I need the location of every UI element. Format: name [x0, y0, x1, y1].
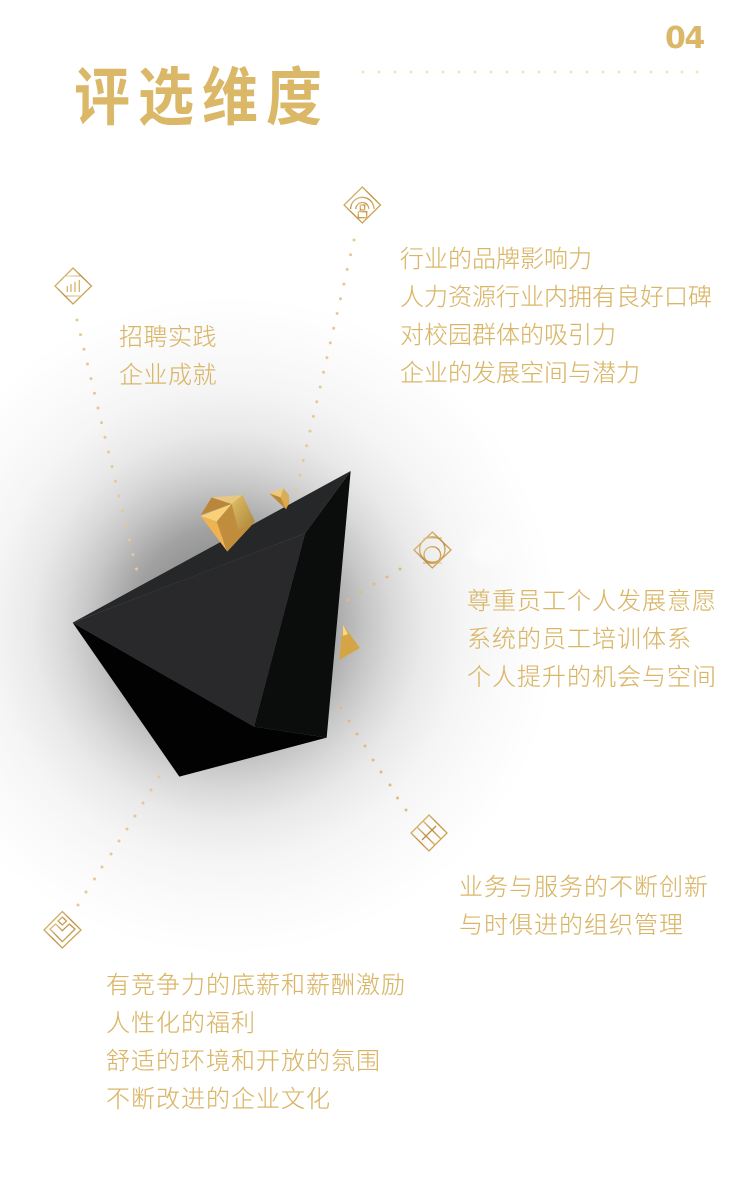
text block: lower left — [106, 972, 406, 1113]
text block: top — [400, 246, 712, 387]
text block: lower left: 有竞争力的底薪和薪酬激励 — [106, 972, 406, 999]
gem: hidden behind polyhedron on right — [339, 625, 360, 660]
text block: lower left: 舒适的环境和开放的氛围 — [106, 1048, 381, 1075]
dotted line: to lower right icon — [339, 706, 408, 812]
text block: lower right: 业务与服务的不断创新 — [459, 874, 709, 901]
title: 评选维度 — [74, 62, 330, 133]
dotted line: to right icon — [346, 568, 402, 602]
gem: large gold — [201, 495, 255, 552]
text block: top: 对校园群体的吸引力 — [400, 322, 616, 349]
dotted line: to lower left icon — [76, 776, 160, 906]
text block: top: 人力资源行业内拥有良好口碑 — [400, 284, 712, 311]
icon: diamond with circles (right) — [414, 532, 451, 568]
icon: diamond with bars (left) — [55, 268, 92, 304]
text block: left: 企业成就 — [119, 362, 217, 389]
text block: right: 系统的员工培训体系 — [467, 626, 692, 653]
gem: small gold — [269, 488, 289, 509]
text block: right: 尊重员工个人发展意愿 — [467, 588, 717, 615]
text block: top: 行业的品牌影响力 — [400, 246, 592, 273]
text block: lower right: 与时俱进的组织管理 — [459, 912, 684, 939]
page number: 04 — [665, 21, 704, 56]
text block: right: 个人提升的机会与空间 — [467, 664, 717, 691]
text block: left — [119, 324, 217, 389]
text block: lower left: 人性化的福利 — [106, 1010, 256, 1037]
dotted line: top dots — [362, 70, 698, 74]
text block: lower right — [459, 874, 709, 939]
dotted line: to top icon — [295, 238, 356, 492]
black polyhedron — [73, 471, 351, 777]
icon: diamond with nested squares (lower right) — [411, 815, 447, 851]
text block: lower left: 不断改进的企业文化 — [106, 1086, 331, 1113]
text block: right — [467, 588, 717, 691]
text block: left: 招聘实践 — [119, 324, 217, 351]
text block: top: 企业的发展空间与潜力 — [400, 360, 640, 387]
icon: diamond with chevron (lower left) — [44, 912, 81, 948]
dotted line: to left icon — [76, 318, 138, 570]
icon: diamond with spotlight (top) — [344, 187, 380, 223]
